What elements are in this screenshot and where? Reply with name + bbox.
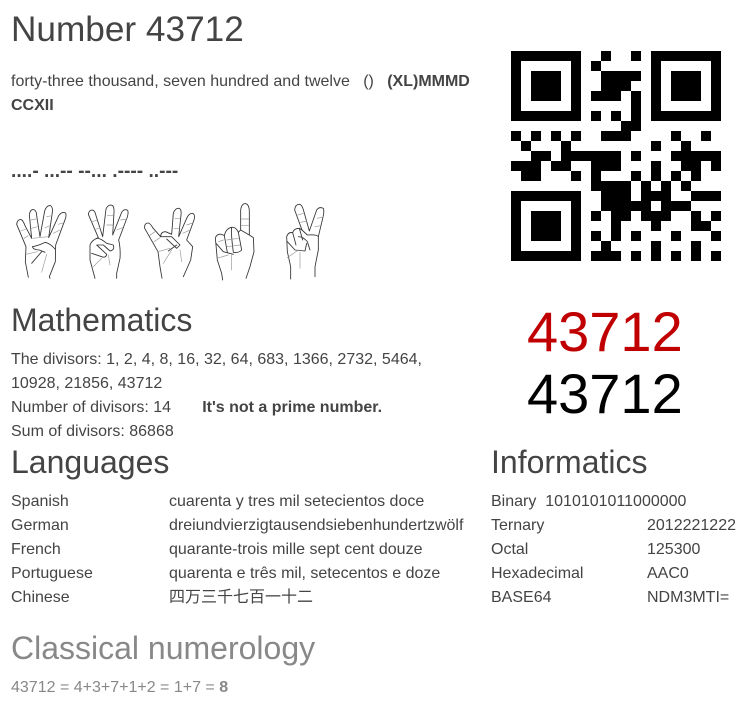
languages table	[11, 493, 464, 606]
heading: Classical numerology: Classical numerology	[11, 630, 315, 666]
base labels: Binary 1010101011000000 Ternary Octal Hexadecimal BASE64	[491, 493, 686, 606]
hand: two	[287, 204, 324, 279]
icon: finger-spelling hands	[16, 203, 324, 280]
number name and roman numeral: forty-three thousand, seven hundred and twelve () (XL)MMMD CCXII	[11, 73, 470, 114]
hand: three with thumb	[145, 208, 195, 278]
base values: 2012221222 125300 AAC0 NDM3MTI=	[647, 517, 736, 606]
translations: cuarenta y tres mil setecientos doce dreiundvierzigtausendsiebenhundertzwölf quarante-trois mille sept cent douze quarenta e três mil, setecentos e doze 四万三千七百一十二	[169, 493, 463, 606]
divisors text: The divisors: 1, 2, 4, 8, 16, 32, 64, 683, 1366, 2732, 5464, 10928, 21856, 43712 Number of divisors: 14 It's not a prime number. Sum of divisors: 86868	[11, 351, 422, 440]
numerology sum: 43712 = 4+3+7+1+2 = 1+7 = 8	[11, 679, 228, 696]
QR code	[511, 51, 721, 261]
informatics table	[491, 493, 736, 606]
hand: four	[17, 206, 66, 278]
hand: three	[88, 205, 128, 278]
language names: Spanish German French Portuguese Chinese	[11, 493, 93, 606]
heading: Informatics: Informatics	[491, 444, 647, 480]
heading: Languages: Languages	[11, 444, 169, 480]
red number: 43712	[527, 300, 683, 363]
title: Number 43712	[11, 10, 244, 49]
hand: one	[215, 204, 254, 280]
morse code: ....- ...-- --... .---- ..---	[11, 161, 178, 182]
heading: Mathematics: Mathematics	[11, 302, 192, 338]
black number: 43712	[527, 362, 683, 425]
